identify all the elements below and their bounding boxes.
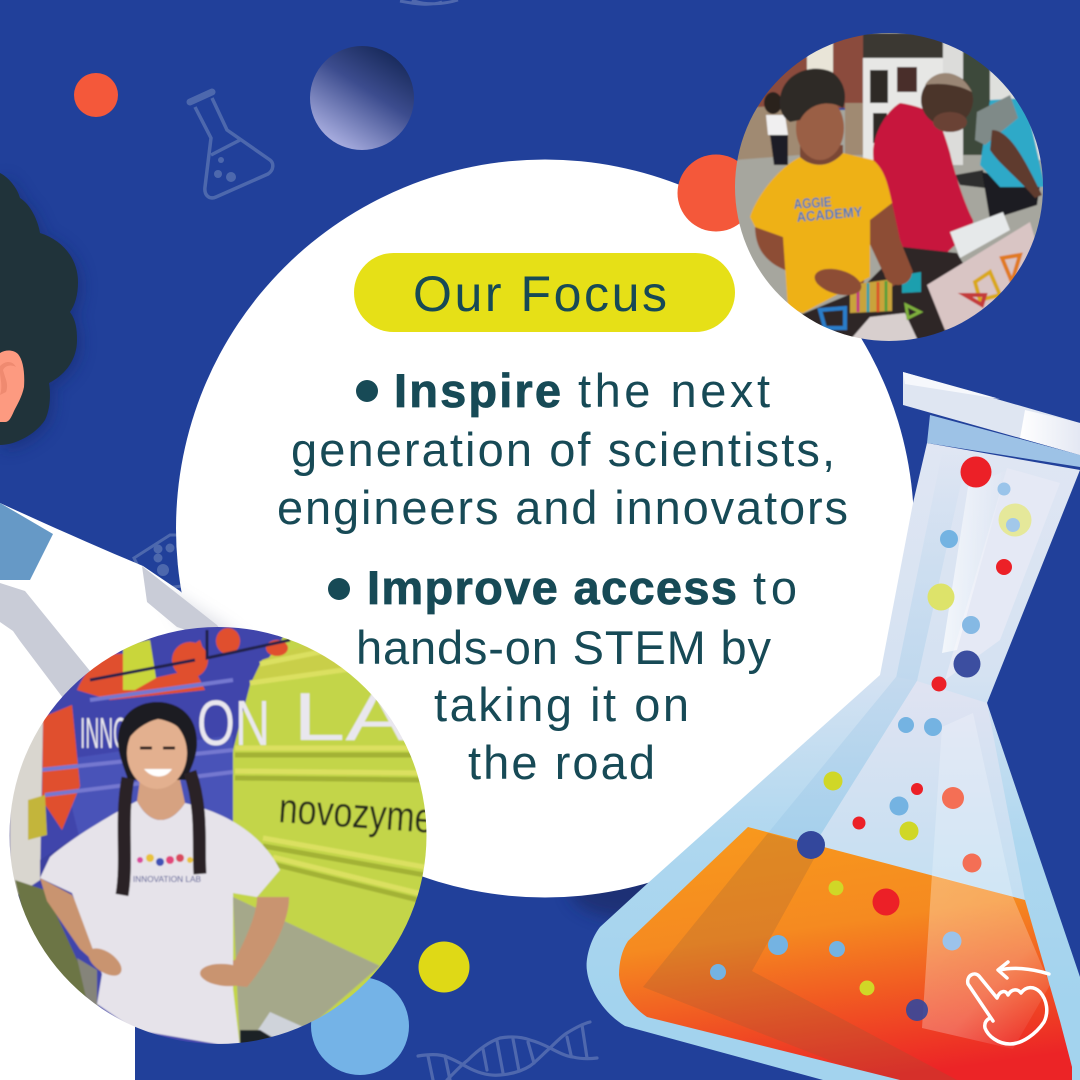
- stone walls: [735, 105, 800, 160]
- bus yellow accent: [123, 640, 156, 690]
- text block: improve access: taking it on: [434, 678, 689, 731]
- text block: inspire: generation of scientists,: [291, 423, 835, 476]
- central body: [813, 681, 1025, 900]
- flask collar band: [927, 415, 1080, 467]
- bus ridges lime: [235, 650, 430, 903]
- pill: heading background: [354, 253, 735, 332]
- bus lower left dark blue: [40, 848, 58, 884]
- brick wall left: [757, 57, 808, 108]
- clear bin bottom: [850, 313, 920, 345]
- eyes and smile: [140, 746, 175, 750]
- photo: woman in front of Innovation Lab bus: INNO: [80, 709, 128, 758]
- panel: white circle: [176, 160, 914, 898]
- shirt text: AGGIE: [793, 193, 832, 212]
- text block: improve access: [328, 561, 797, 789]
- liquid dark facet: [643, 833, 957, 1080]
- text block: inspire: Inspire: [394, 364, 561, 417]
- right pillar: [943, 30, 963, 165]
- backpack: [975, 95, 1018, 145]
- woman arm: [990, 130, 1042, 198]
- lab coat: [0, 503, 230, 1080]
- liquid: [619, 827, 1072, 1080]
- braids: [122, 778, 128, 895]
- tiles small: [902, 272, 921, 293]
- ear: [0, 350, 24, 422]
- left arm: [40, 878, 94, 958]
- tile stack: [850, 279, 892, 313]
- icon: faint DNA top: [400, 0, 458, 4]
- decoration: gradient sphere: [310, 46, 414, 150]
- grass: [14, 880, 99, 1006]
- tiles in bin: [965, 255, 1020, 305]
- central light strip: [932, 713, 1013, 897]
- bus lime bright top: [252, 656, 270, 681]
- collar: [0, 503, 53, 580]
- bus blue base: [10, 627, 284, 1044]
- neck: [137, 780, 185, 820]
- hair shadow: [3, 177, 81, 449]
- flask cap: [903, 372, 1080, 455]
- icon: faint petri dish: [134, 535, 190, 590]
- photo: children building with magnetic tiles: ACADEMY: [796, 203, 864, 225]
- hair: [0, 173, 78, 445]
- neck: [800, 145, 843, 165]
- doors: [863, 30, 943, 160]
- decoration: orange dot top left: [74, 73, 118, 117]
- ground: [735, 108, 1043, 314]
- shirt: [40, 801, 280, 1048]
- bubbles: [710, 456, 1032, 1021]
- hair top: [130, 702, 178, 736]
- text block: improve access: hands-on STEM by: [356, 621, 772, 674]
- lapel left: [0, 583, 90, 698]
- woman skirt: [982, 172, 1040, 220]
- bus window frames: [90, 630, 290, 680]
- decoration: yellow dot bottom: [418, 942, 470, 992]
- face: [796, 96, 844, 160]
- illustration: flask: [587, 372, 1080, 1080]
- head boy two: [921, 74, 973, 126]
- building edge left: [10, 720, 43, 900]
- lapel right: [142, 566, 232, 645]
- right arm: [232, 896, 290, 988]
- pillar: [806, 43, 834, 74]
- silver step rail: [258, 1012, 303, 1038]
- bus yellow sign: [28, 795, 47, 840]
- road: [77, 958, 97, 1015]
- text block: inspire: [277, 364, 848, 534]
- title: Our Focus: [413, 266, 667, 322]
- hair back: [118, 702, 197, 780]
- upper wall: [806, 56, 846, 111]
- photo: children building with magnetic tiles: [730, 30, 1050, 350]
- text block: improve access: to: [753, 561, 797, 614]
- cap top highlight: [903, 372, 1000, 399]
- yellow shirt: [750, 153, 892, 313]
- decoration: orange dot by photo: [678, 154, 754, 232]
- shadow below white circle: [570, 862, 680, 918]
- bus lime panel: [232, 637, 426, 1043]
- shirt logo: INNOVATION LAB: [133, 875, 201, 884]
- icon: swipe hand: [968, 962, 1049, 1044]
- bus lighter blue patch: [72, 736, 233, 834]
- right windows: [963, 40, 993, 155]
- neck white highlight: [942, 470, 1007, 653]
- photo: woman in front of Innovation Lab bus: novozyme: [277, 784, 435, 842]
- black table: [800, 247, 985, 345]
- photo: woman in front of Innovation Lab bus: ON: [197, 687, 270, 759]
- dark lower bus: [73, 880, 110, 977]
- neck lighter panel: [945, 468, 1060, 680]
- red hoodie boy: [873, 103, 973, 253]
- text block: improve access: the road: [468, 736, 655, 789]
- cap highlight: [1020, 410, 1080, 455]
- clear bin right: [927, 222, 1042, 332]
- entry mat: [955, 170, 985, 188]
- bus lower silver: [233, 897, 380, 1050]
- hands: [812, 259, 912, 300]
- paper: [950, 212, 1010, 258]
- text block: inspire: the next: [578, 364, 770, 417]
- shirt logo: [133, 854, 201, 884]
- brick wall right: [833, 33, 864, 108]
- background person: [764, 92, 782, 114]
- illustration: scientist: [0, 173, 250, 1080]
- icon: faint flask outline: [190, 92, 273, 198]
- liquid light strip: [922, 874, 1050, 1049]
- bus ridges blue: [40, 680, 233, 795]
- shoulder facet: [768, 677, 917, 847]
- text block: inspire: engineers and innovators: [277, 481, 848, 534]
- left arm boy one: [755, 225, 865, 295]
- face: [127, 717, 187, 789]
- photo: woman in front of Innovation Lab bus: LA: [293, 679, 409, 755]
- hands: [88, 948, 236, 987]
- photo: woman in front of Innovation Lab bus: [0, 620, 440, 1050]
- lapel shadow: [160, 585, 250, 645]
- neck mid-blue stripe: [896, 448, 968, 681]
- woman blue shirt: [980, 98, 1045, 187]
- bus dark bottom: [239, 1029, 272, 1043]
- flask glass body: [587, 443, 1080, 1080]
- decoration: blue dot bottom: [311, 977, 409, 1075]
- right arm boy one: [868, 203, 913, 287]
- hair: [780, 69, 845, 122]
- text block: improve access: Improve access: [367, 561, 737, 614]
- bus red art: [42, 628, 288, 830]
- icon: DNA helix bottom: [418, 1022, 597, 1080]
